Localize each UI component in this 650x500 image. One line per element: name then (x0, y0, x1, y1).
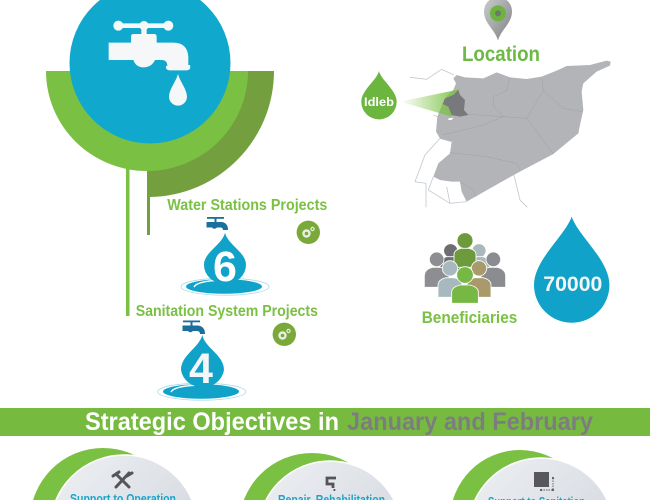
stat drop: 70000 beneficiaries: 70000 (543, 273, 602, 296)
heading: beneficiaries: Beneficiaries (422, 309, 517, 327)
banner: strategic objectives: January and February (347, 408, 593, 436)
objective card: support to operation (30, 448, 198, 500)
person (468, 244, 490, 271)
highlight beam (400, 89, 459, 117)
person (481, 252, 506, 287)
icon: tools (113, 472, 132, 487)
emblem: water tap on green bowl (46, 0, 274, 316)
icon: tap (109, 21, 190, 106)
water drop: 4 projects: 4 (189, 345, 213, 393)
person (438, 261, 462, 297)
banner: strategic objectives (0, 408, 650, 436)
icon: scaled square (534, 472, 554, 491)
person (467, 261, 491, 297)
icon: gears badge (297, 221, 320, 244)
water drop: 6 projects: 6 (213, 243, 237, 291)
heading: sanitation system projects: Sanitation System Projects (136, 303, 318, 320)
icon: location pin (484, 0, 512, 41)
water drop: 4 projects (158, 320, 246, 400)
heading: water stations projects: Water Stations Projects (167, 197, 327, 214)
person (440, 244, 461, 271)
icon: pipe (327, 478, 336, 488)
callout: Idleb drop (361, 71, 397, 119)
objective card: repair, rehabilitation (239, 453, 402, 500)
objective card: support to sanitation (450, 450, 614, 500)
icon: gears badge (273, 323, 296, 346)
map: Syria with Idleb highlighted (400, 61, 611, 207)
person (424, 252, 449, 287)
water drop: 6 projects (181, 217, 269, 295)
icon: small tap (206, 217, 228, 230)
person (452, 267, 478, 303)
stat drop: 70000 beneficiaries (534, 217, 609, 323)
heading: location: Location (462, 43, 540, 66)
icon: group of people (424, 233, 506, 303)
callout: Idleb drop: Idleb (364, 97, 394, 109)
person (454, 233, 476, 267)
icon: small tap (182, 320, 205, 334)
Idleb region (443, 90, 468, 117)
banner: strategic objectives: Strategic Objectives in (85, 408, 339, 436)
